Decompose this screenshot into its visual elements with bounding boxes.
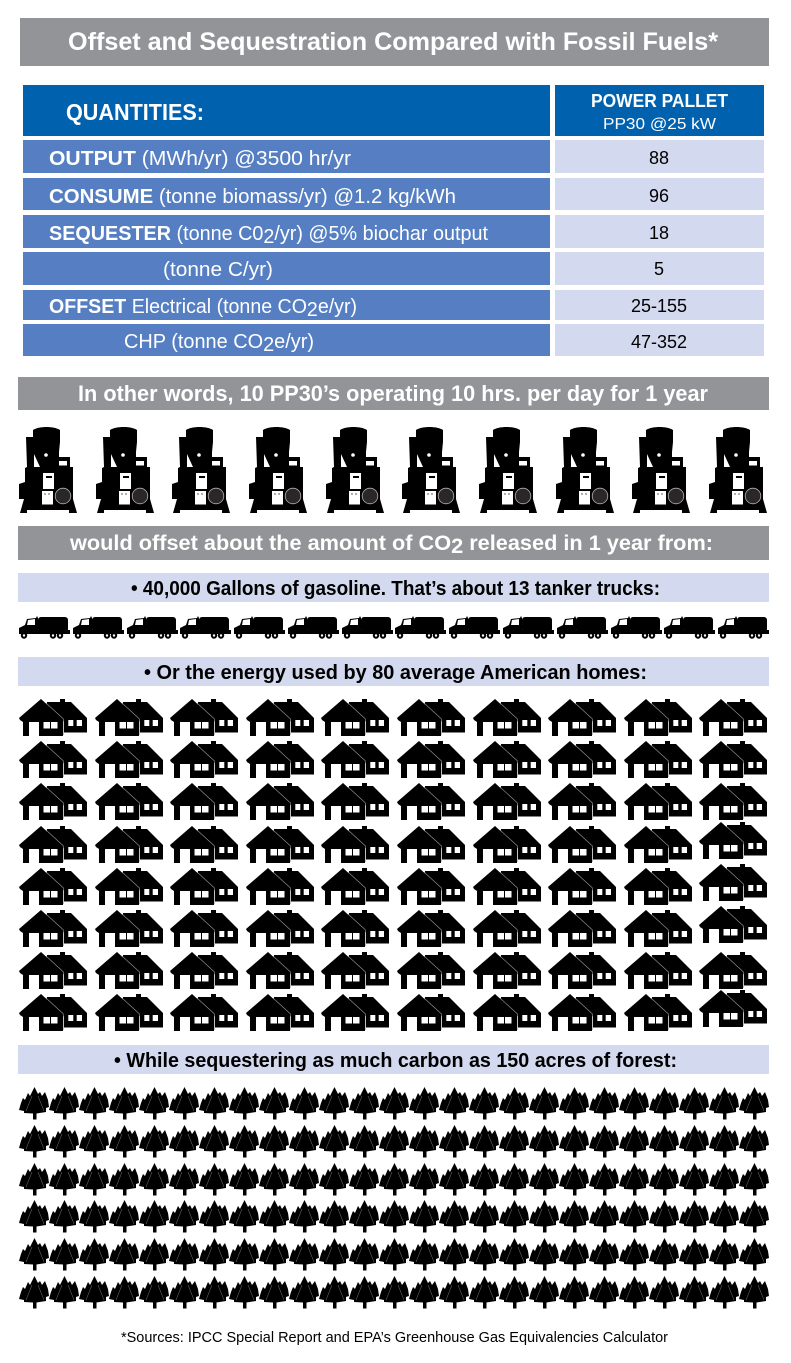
banner: would offset: released in 1 year from: [463, 532, 713, 555]
table: quantities [23, 85, 764, 356]
heading: forest [18, 1045, 769, 1074]
row: offset electrical: 25-155 [631, 296, 687, 316]
title [20, 18, 769, 66]
row: tonne carbon [23, 252, 764, 285]
footnote: sources: *Sources: IPCC Special Report and EPA’s Greenhouse Gas Equivalencies Calculator [121, 1330, 668, 1346]
row: sequester: 2 [263, 226, 274, 248]
row: sequester: /yr) @5% biochar output [274, 223, 488, 245]
row: consume: 96 [649, 186, 669, 206]
row: consume: CONSUME (tonne biomass/yr) @1.2 kg/kWh [49, 186, 456, 208]
row: sequester: 18 [649, 223, 669, 243]
row: sequester: SEQUESTER (tonne C0 [49, 223, 264, 245]
row: output: 88 [649, 148, 669, 168]
row: consume [23, 178, 764, 210]
banner: would offset [18, 526, 769, 560]
heading: homes: • Or the energy used by 80 average American homes: [144, 662, 647, 684]
table header: power pallet: POWER PALLET [591, 91, 728, 111]
row: offset chp: e/yr) [274, 331, 314, 353]
row: output [23, 140, 764, 173]
banner: in other words: In other words, 10 PP30’s operating 10 hrs. per day for 1 year [78, 381, 708, 406]
row: tonne carbon: (tonne C/yr) [163, 259, 273, 281]
icons: 10 power pallet machines [19, 427, 767, 513]
table header: quantities [23, 85, 550, 136]
row: sequester [23, 215, 764, 248]
heading: gasoline: • 40,000 Gallons of gasoline. That’s about 13 tanker trucks: [131, 578, 660, 600]
icons: tanker trucks [19, 616, 769, 639]
row: offset chp [23, 324, 764, 356]
table header: power pallet [555, 85, 764, 136]
banner: would offset: 2 [451, 535, 463, 558]
row: offset electrical [23, 290, 764, 321]
icons: houses [19, 699, 767, 1031]
row: output: OUTPUT (MWh/yr) @3500 hr/yr [49, 148, 351, 170]
row: offset electrical: e/yr) [318, 296, 357, 318]
table header: power pallet: PP30 @25 kW [603, 116, 717, 133]
row: offset electrical: OFFSET Electrical (tonne CO [49, 296, 311, 318]
heading: homes [18, 657, 769, 686]
heading: forest: • While sequestering as much carbon as 150 acres of forest: [114, 1050, 677, 1072]
row: offset chp: 47-352 [631, 332, 687, 352]
title: Offset and Sequestration Compared with Fossil Fuels* [68, 28, 718, 56]
icons: trees [19, 1087, 769, 1308]
heading: gasoline [18, 573, 769, 602]
row: offset chp: CHP (tonne CO [124, 331, 264, 353]
table header: quantities: QUANTITIES: [66, 99, 204, 125]
row: tonne carbon: 5 [654, 259, 664, 279]
banner: would offset: would offset about the amount of CO [70, 532, 439, 555]
banner: in other words [18, 377, 769, 410]
row: offset electrical: 2 [307, 299, 318, 321]
row: offset chp: 2 [263, 334, 274, 356]
